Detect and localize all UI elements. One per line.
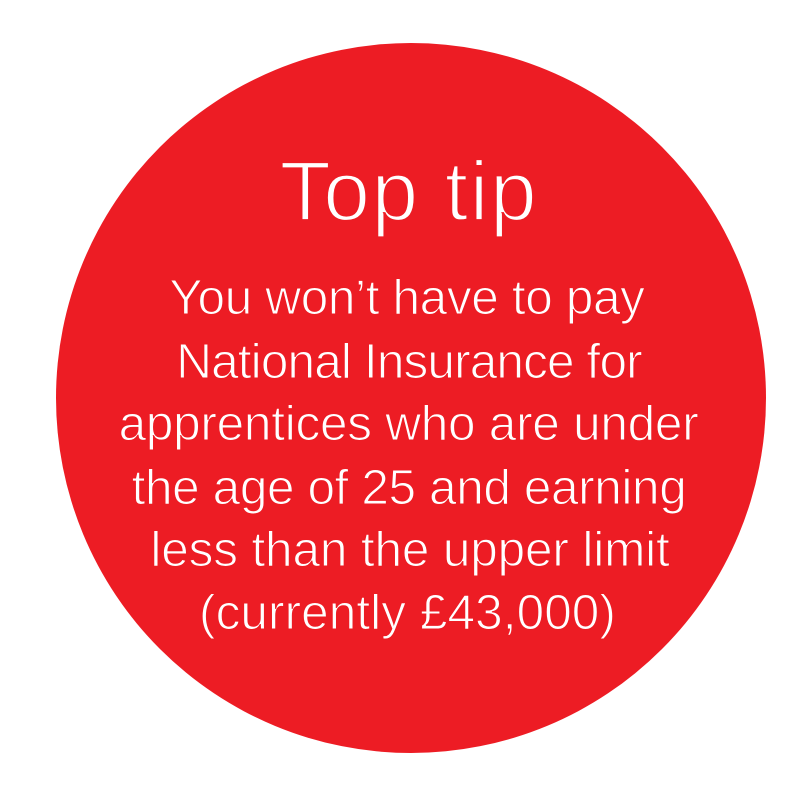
text block: tip body: National Insurance for: [176, 334, 642, 389]
text block: tip body: (currently £43,000): [199, 585, 616, 640]
text block: tip body: the age of 25 and earning: [132, 460, 686, 515]
text block: tip body: less than the upper limit: [150, 522, 670, 577]
text block: tip body: apprentices who are under: [119, 396, 698, 451]
text block: tip body: You won’t have to pay: [169, 270, 645, 325]
panel: red circle: [56, 43, 766, 753]
heading: Top tip: Top tip: [280, 144, 538, 238]
